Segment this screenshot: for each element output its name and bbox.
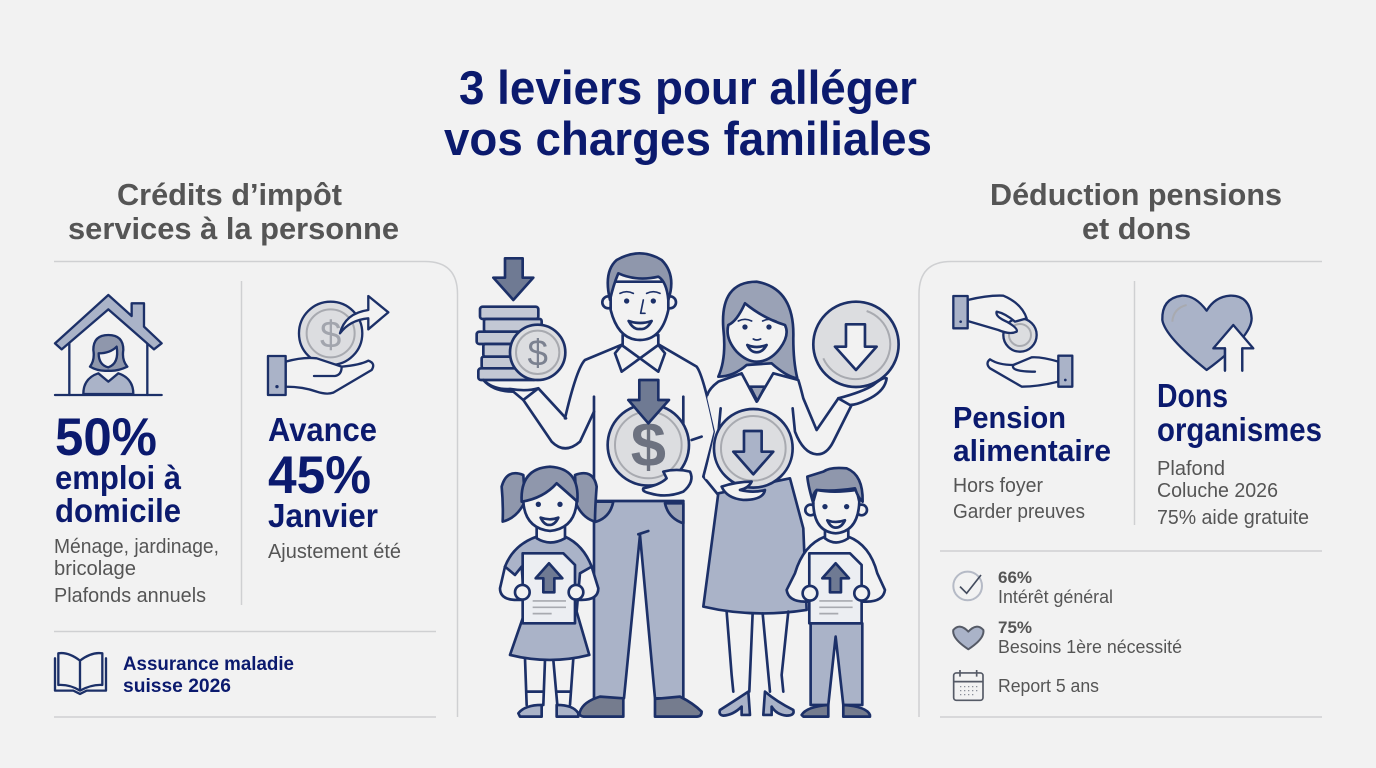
man [523,253,718,717]
heading: crédits d'impôt: services à la personne [68,211,399,246]
illustration: family with coins [477,253,899,717]
icon: hands exchanging coin [953,296,1072,387]
text: ménage details [54,536,219,607]
stat: avance 45% janvier: 45% [268,446,371,505]
text: 75% besoins: 75% [998,618,1032,637]
girl with document [500,467,598,717]
text: pension alimentaire [953,400,1111,523]
center coin with arrow [608,380,691,495]
text: ménage details: Ménage, jardinage, [54,536,219,558]
text: 75% besoins [998,618,1182,657]
woman coin with arrow [714,409,793,500]
text: dons organismes: organismes [1157,411,1322,448]
title [444,61,932,165]
title: vos charges familiales [444,112,932,165]
heading: déduction pensions [990,177,1282,246]
stat: 50% emploi à domicile [55,408,182,529]
text: 66% intérêt général [998,568,1113,607]
text: pension alimentaire: Garder preuves [953,501,1085,523]
heading: déduction pensions: Déduction pensions [990,177,1282,212]
text: dons organismes: 75% aide gratuite [1157,507,1309,529]
stat: avance 45% janvier: Avance [268,411,377,448]
boy with document [787,468,885,717]
icon: check circle [953,572,982,600]
text: dons organismes: Dons [1157,377,1228,414]
icon: calendar [954,670,983,700]
text: 75% besoins: Besoins 1ère nécessité [998,637,1182,657]
text: ajustement été: Ajustement été [268,541,401,563]
large coin held up [813,302,899,405]
woman [703,282,852,716]
text: assurance maladie: Assurance maladie [123,653,294,675]
text: pension alimentaire: Hors foyer [953,475,1043,497]
text: ménage details: bricolage [54,558,136,580]
center coin with arrow: $ [631,411,666,481]
icon: hand with coin and arrow: $ [320,313,341,356]
heading: crédits d'impôt [68,177,399,246]
text: dons organismes [1157,377,1322,529]
stat: 50% emploi à domicile: 50% [55,408,157,467]
stack of coins with down arrow [477,258,565,400]
text: 66% intérêt général: Intérêt général [998,587,1113,607]
panel: crédits d'impôt services à la personne [54,262,458,717]
text: pension alimentaire: alimentaire [953,433,1111,468]
text: dons organismes: Plafond [1157,458,1225,480]
stat: avance 45% janvier [268,411,378,534]
text: assurance maladie [123,653,294,697]
heading: crédits d'impôt: Crédits d’impôt [117,177,342,212]
icon: heart with up arrow [1162,296,1253,372]
icon: hand with coin and arrow [268,296,388,395]
stat: 50% emploi à domicile: emploi à [55,459,182,496]
title: 3 leviers pour alléger [459,61,917,114]
icon: house with person [55,295,162,395]
icon: small heart [953,627,983,649]
text: ménage details: Plafonds annuels [54,585,206,607]
text: report 5 ans: Report 5 ans [998,676,1099,696]
text: dons organismes: Coluche 2026 [1157,480,1278,502]
text: assurance maladie: suisse 2026 [123,675,231,697]
text: pension alimentaire: Pension [953,400,1066,435]
stack of coins with down arrow: $ [527,333,548,374]
stat: 50% emploi à domicile: domicile [55,492,181,529]
icon: open book [55,653,106,694]
heading: déduction pensions: et dons [1082,211,1191,246]
stat: avance 45% janvier: Janvier [268,497,378,534]
text: 66% intérêt général: 66% [998,568,1032,587]
panel: déduction pensions et dons [919,262,1322,717]
